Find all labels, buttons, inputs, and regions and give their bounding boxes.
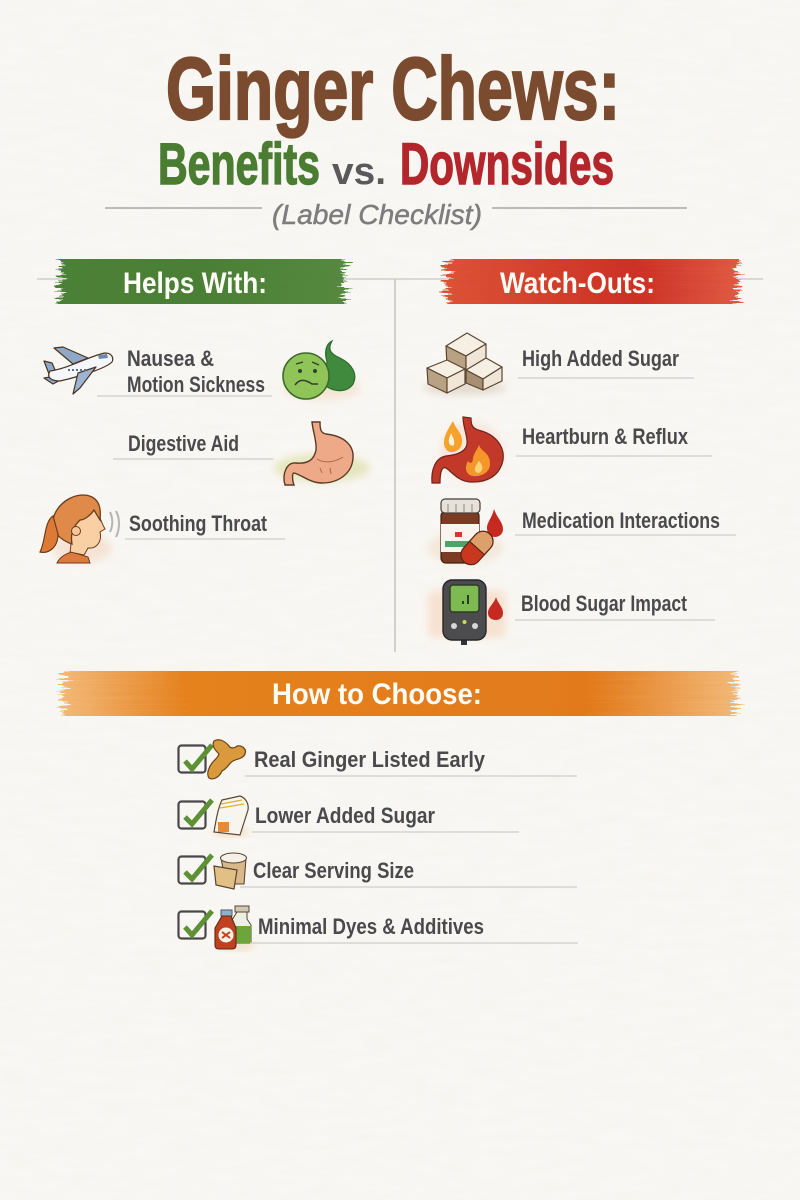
icon: stomach with flames — [432, 417, 504, 483]
heading banner: How to Choose: How to Choose: — [272, 678, 482, 711]
checklist row: Clear Serving Size — [178, 853, 577, 889]
icon: additive bottles — [215, 906, 255, 950]
icon: ginger root — [208, 740, 245, 779]
icon: airplane — [44, 347, 113, 394]
heading banner: Helps With: Helps With: — [123, 267, 267, 300]
icon: checkbox — [178, 745, 212, 772]
checklist row: Lower Added Sugar — [178, 796, 519, 836]
icon: food pouch — [213, 796, 249, 836]
item text: Nausea and Motion Sickness: Motion Sickness — [127, 372, 265, 397]
heading banner: Helps With — [60, 259, 344, 304]
checklist row: Minimal Dyes and Additives: Minimal Dyes & Additives — [258, 914, 484, 939]
icon: woman profile — [40, 495, 119, 563]
item text: Medication Interactions: Medication Interactions — [522, 508, 720, 533]
item text: Digestive Aid: Digestive Aid — [128, 431, 239, 456]
title — [105, 39, 687, 230]
item text: High Added Sugar: High Added Sugar — [522, 346, 679, 371]
subtitle: Benefits vs. Downsides: Benefits — [158, 132, 320, 197]
item text: Soothing Throat: Soothing Throat — [129, 511, 268, 536]
subtitle: Benefits vs. Downsides — [158, 132, 614, 197]
subtitle: Benefits vs. Downsides: Downsides — [400, 132, 614, 197]
heading banner: Watch-Outs — [446, 259, 738, 304]
icon: checkbox — [178, 911, 212, 938]
icon: queasy face and stomach — [283, 341, 360, 400]
title line: Ginger Chews: Ginger Chews: — [166, 39, 620, 138]
icon: serving cup and packet — [214, 853, 246, 889]
icon: medicine bottle and pill — [427, 499, 503, 569]
icon: checkbox — [178, 855, 212, 884]
subtitle note: Label Checklist: (Label Checklist) — [272, 199, 482, 230]
panel: helps with — [40, 259, 370, 563]
icon: stomach — [274, 422, 370, 485]
subtitle: Benefits vs. Downsides: vs. — [332, 151, 386, 193]
checklist row: Real Ginger Listed Early — [178, 740, 577, 779]
item text: Blood Sugar Impact: Blood Sugar Impact — [521, 591, 688, 616]
checklist row: Real Ginger Listed Early: Real Ginger Listed Early — [254, 747, 486, 772]
item text: Heartburn and Reflux: Heartburn & Reflux — [522, 424, 689, 449]
panel: watch-outs — [423, 259, 738, 645]
item text: Nausea and Motion Sickness — [97, 346, 272, 397]
checklist row: Minimal Dyes and Additives — [178, 906, 578, 950]
checklist row: Clear Serving Size: Clear Serving Size — [253, 858, 414, 883]
heading banner: How to Choose — [64, 671, 736, 716]
icon: glucose meter — [428, 580, 506, 645]
icon: checkbox — [178, 800, 212, 828]
heading banner: Watch-Outs: Watch-Outs: — [500, 267, 655, 300]
panel: how to choose — [64, 671, 736, 950]
item text: Nausea and Motion Sickness: Nausea & — [127, 346, 214, 371]
icon: sugar cubes — [423, 333, 507, 395]
checklist row: Lower Added Sugar: Lower Added Sugar — [255, 803, 435, 828]
